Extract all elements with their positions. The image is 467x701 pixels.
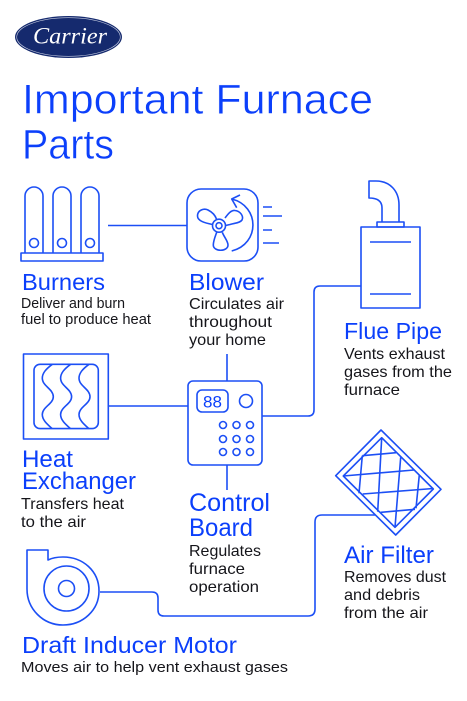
text: heat exchanger description: to the air [21,514,87,531]
text: flue pipe description: gases from the [344,364,452,381]
text: burners description [21,296,151,328]
connector: blower to control board [226,354,228,381]
text: air filter description [344,569,447,622]
logo: Carrier [15,16,122,58]
text: blower description: Circulates air [189,296,285,313]
text: blower description: your home [189,332,266,349]
text: flue pipe description: Vents exhaust [344,346,446,363]
title: Important Furnace [22,76,373,122]
title [22,76,373,167]
text: draft inducer motor description: Moves air to help vent exhaust gases [21,660,288,676]
text: blower description [189,296,285,349]
text: heat exchanger description [21,496,125,531]
title: Parts [22,120,114,167]
icon: air filter [336,430,441,535]
text: control board description: furnace [189,561,245,578]
text: blower description: throughout [189,314,273,331]
text: flue pipe description [344,346,452,399]
heading: heat exchanger: Exchanger [22,468,136,495]
text: control board description [189,543,261,596]
heading: heat exchanger [22,446,136,495]
text: air filter description: and debris [344,587,420,604]
text: flue pipe description: furnace [344,382,400,399]
icon: draft inducer motor [27,550,99,625]
heading: flue pipe: Flue Pipe [344,318,442,344]
icon: flue pipe [361,181,420,308]
icon: burners [21,187,103,261]
text: burners description: fuel to produce heat [21,312,151,328]
icon: blower [187,189,258,261]
connector: draft inducer motor to air filter [100,515,375,616]
heading: air filter: Air Filter [344,542,434,569]
icon: heat exchanger [24,354,108,439]
connector: control board to flue pipe [262,286,361,416]
heading: blower: Blower [189,269,264,295]
heading: control board [189,489,270,542]
text: air filter description: Removes dust [344,569,447,586]
heading: control board: Board [189,514,253,542]
connector: control board to label [226,465,228,490]
heading: burners: Burners [22,269,105,295]
icon: air lines [263,207,282,243]
text: heat exchanger description: Transfers heat [21,496,125,513]
heading: draft inducer motor: Draft Inducer Motor [22,632,237,658]
text: control board description: Regulates [189,543,261,560]
text: air filter description: from the air [344,605,429,622]
connector: burners to blower [108,224,187,226]
heading: heat exchanger: Heat [22,446,73,473]
connector: heat exchanger to control board [108,405,188,407]
icon: control board [188,381,262,465]
text: control board description: operation [189,579,259,596]
text: burners description: Deliver and burn [21,296,125,312]
heading: control board: Control [189,489,270,517]
icon: control board: 88 [203,392,222,411]
logo: Carrier: Carrier [33,24,108,48]
